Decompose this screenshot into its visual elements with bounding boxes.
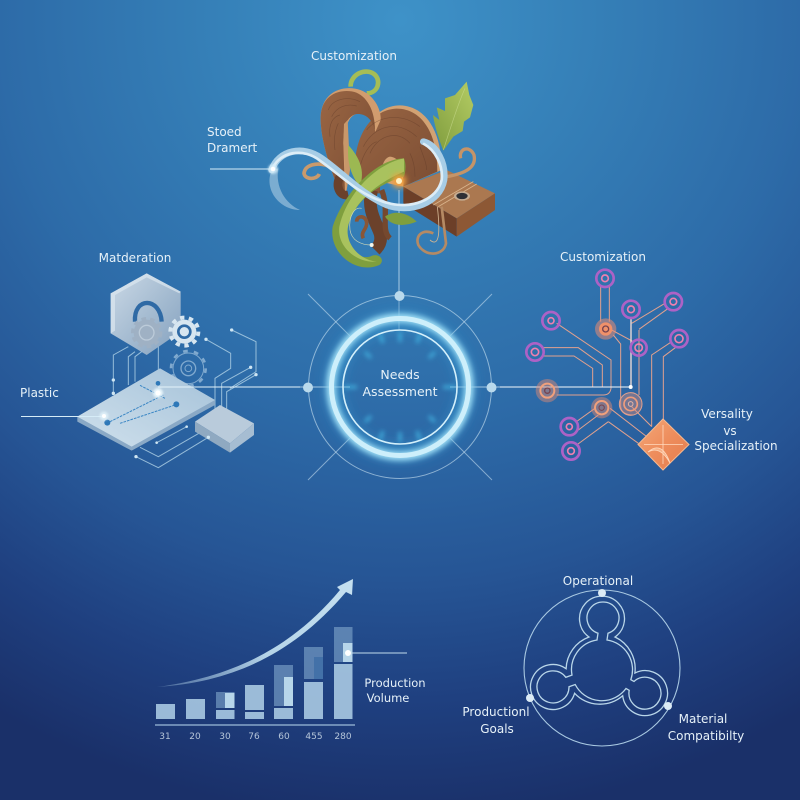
callout line (345, 650, 407, 656)
label: production goals: Productionl (462, 705, 530, 719)
panel: right circuit customization (500, 250, 778, 470)
label: production volume: Production (364, 676, 426, 690)
label: stored parameter: Stoed (207, 125, 242, 139)
icon: orange diamond (638, 419, 689, 470)
illustration art (269, 72, 495, 267)
axis values: 455 (305, 732, 323, 742)
axis values (159, 732, 352, 742)
axis values: 30 (219, 732, 231, 742)
label: material compatibility: Material (679, 712, 727, 726)
connector lines from hub (160, 190, 632, 480)
panel: production volume bar chart (155, 579, 426, 742)
label: production volume: Volume (367, 691, 409, 705)
callout lines and glow dots (21, 387, 300, 420)
label: operational: Operational (563, 574, 633, 588)
label: stored parameter: Dramert (207, 141, 258, 155)
outer circle (524, 590, 680, 746)
illustration art (77, 273, 258, 468)
hub label: Assessment (363, 384, 438, 399)
growth arrow (157, 579, 353, 687)
axis values: 60 (278, 732, 290, 742)
panel: left material illustration (20, 251, 300, 468)
glowing ring (331, 318, 469, 456)
label: production goals: Goals (480, 722, 514, 736)
axis values: 20 (189, 732, 201, 742)
label: material compatibility: Compatibilty (668, 729, 744, 743)
axis values: 280 (334, 732, 352, 742)
label: versatility vs specialization: vs (723, 424, 737, 438)
heading: right customization: Customization (560, 250, 646, 264)
label: versatility vs specialization: Versality (701, 407, 753, 421)
panel: top wood and vine illustration (207, 49, 495, 267)
nodes (526, 589, 672, 710)
axis values: 31 (159, 732, 171, 742)
bars (156, 627, 352, 719)
circuit traces and nodes (500, 270, 688, 460)
hub label: Needs (380, 367, 420, 382)
callout line and glow dots (210, 164, 406, 188)
panel: central needs assessment hub (160, 190, 632, 480)
axis (155, 724, 355, 726)
heading: moderation: Matderation (99, 251, 171, 265)
label: plastic: Plastic (20, 386, 59, 400)
panel: trefoil diagram (462, 574, 744, 746)
heading: top customization: Customization (311, 49, 397, 63)
hub nodes (303, 291, 496, 392)
axis values: 76 (248, 732, 260, 742)
label: versatility vs specialization: Specialization (694, 439, 778, 453)
trefoil shape (531, 596, 668, 716)
